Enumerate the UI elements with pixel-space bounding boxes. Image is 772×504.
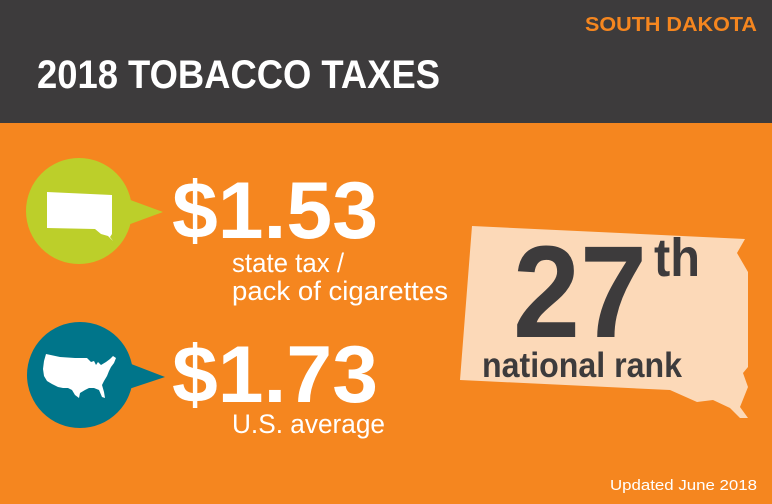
state tax figure: $1.53 xyxy=(172,166,378,256)
state tax figure: state tax / xyxy=(232,248,344,278)
state tax figure: pack of cigarettes xyxy=(232,276,448,306)
icon: USA speech bubble xyxy=(27,322,165,428)
US average figure: U.S. average xyxy=(232,409,385,439)
state label: SOUTH DAKOTA xyxy=(585,14,757,36)
title: 2018 TOBACCO TAXES xyxy=(37,53,440,97)
state tax figure xyxy=(172,166,448,306)
footer note: Updated June 2018 xyxy=(610,477,757,494)
rank panel: state shape xyxy=(460,218,748,418)
header bar xyxy=(0,0,772,123)
rank panel: state shape: th xyxy=(654,228,700,288)
icon: South Dakota speech bubble xyxy=(26,158,163,264)
US average figure: $1.73 xyxy=(172,330,378,420)
rank label: national rank xyxy=(482,346,682,385)
rank number: 27 xyxy=(513,218,647,365)
